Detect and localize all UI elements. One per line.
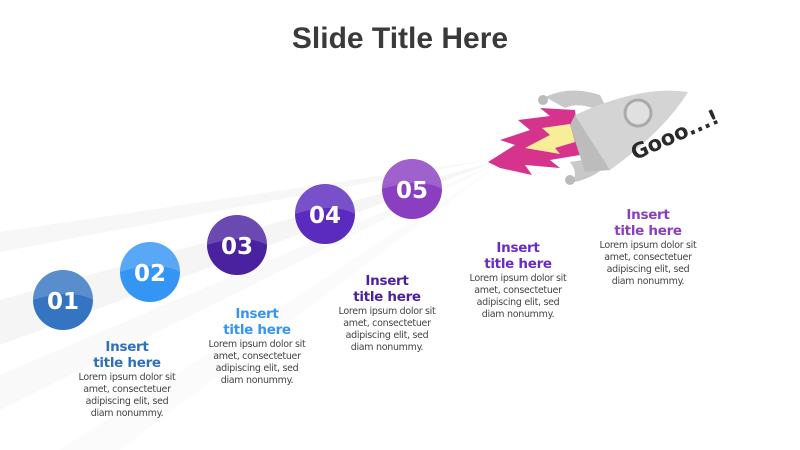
text block 03: title here [353,289,421,305]
text block 03: Lorem ipsum dolor sit amet, consectetuer adipiscing elit, sed diam nonummy. [339,306,435,353]
circle 04 [295,184,355,244]
text block 04 [470,240,566,320]
text block 02: Lorem ipsum dolor sit amet, consectetuer adipiscing elit, sed diam nonummy. [209,339,305,386]
body [575,91,688,170]
circle 02 [120,242,180,302]
circle 03: 03 [221,234,253,260]
circle 02: 02 [134,261,166,287]
text block 03 [339,273,436,353]
text block 01 [79,339,176,419]
text block 04: title here [484,256,552,272]
text block 01: Insert [105,339,149,355]
text block 03: Insert [365,273,409,289]
circle 01 [33,270,93,330]
text block 01: title here [93,355,161,371]
text block 01: Lorem ipsum dolor sit amet, consectetuer adipiscing elit, sed diam nonummy. [79,372,175,419]
circle 01: 01 [47,289,79,315]
circle 03 [207,215,267,275]
text block 05: Insert [626,207,670,223]
circle 05: 05 [396,178,428,204]
text block 02: title here [223,322,291,338]
flame [488,108,580,175]
fins [545,90,610,115]
text block 02 [209,306,306,386]
circle 04: 04 [309,203,341,229]
title: Slide Title Here [292,22,508,55]
Gooo text: Gooo...! [627,105,723,165]
text block 05: title here [614,223,682,239]
text block 05: Lorem ipsum dolor sit amet, consectetuer adipiscing elit, sed diam nonummy. [600,240,696,287]
circle 05 [382,159,442,219]
text block 04: Lorem ipsum dolor sit amet, consectetuer adipiscing elit, sed diam nonummy. [470,273,566,320]
text block 05 [600,207,696,287]
text block 04: Insert [496,240,540,256]
rocket [488,90,688,185]
text block 02: Insert [235,306,279,322]
